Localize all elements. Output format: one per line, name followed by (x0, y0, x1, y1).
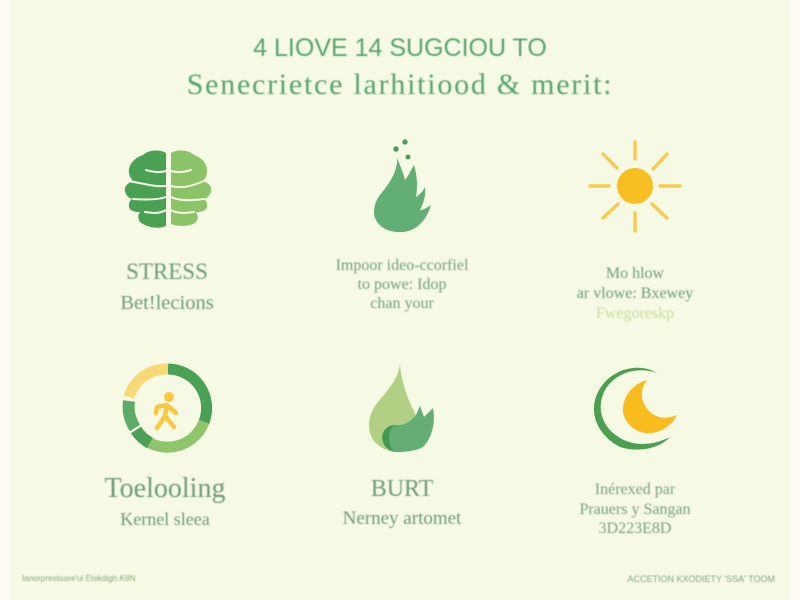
footer: right note: ACCETION KXODIETY 'SSA' TOOM (628, 574, 775, 584)
label: stress: STRESS (126, 259, 208, 284)
text: sun caption: ar vlowe: Bxewey (577, 285, 693, 302)
footer: left note: Ianorprestoare'ul Etekdigh.K8N (22, 574, 136, 583)
text: flame caption: Impoor ideo-ccorfiel (336, 257, 468, 274)
label: burt: BURT (371, 476, 433, 502)
text: sun caption: Fwegoreskp (596, 305, 674, 322)
title: Senecrietce larhitiood & merit: (187, 68, 613, 101)
title (187, 34, 613, 101)
text: moon caption: 3D223E8D (599, 520, 671, 537)
icon: sun (588, 140, 682, 233)
text: moon caption: Inérexed par (595, 481, 675, 498)
text: sun caption (576, 265, 694, 322)
text: flame caption: chan your (370, 295, 434, 312)
icon: droplet with flame (369, 364, 434, 452)
text: moon caption (579, 481, 691, 537)
sublabel: burt: Nerney artomet (343, 508, 461, 529)
icon: crescent moon (594, 368, 677, 450)
text: moon caption: Prauers y Sangan (579, 500, 691, 518)
icon: ring with walking figure (122, 364, 212, 453)
label: toelooling: Toelooling (105, 473, 225, 504)
label: stress (120, 259, 214, 314)
sublabel: stress: Bet!lecions (120, 292, 214, 314)
text: flame caption (336, 257, 468, 312)
icon: brain (124, 150, 212, 228)
label: burt (342, 476, 462, 529)
icon: flame with bubbles (374, 139, 431, 232)
label: toelooling (104, 473, 226, 529)
text: sun caption: Mo hlow (606, 265, 664, 282)
title: 4 LIOVE 14 SUGCIOU TO (253, 34, 547, 62)
text: flame caption: to powe: Idop (358, 276, 446, 293)
sublabel: toelooling: Kernel sleea (120, 509, 210, 529)
